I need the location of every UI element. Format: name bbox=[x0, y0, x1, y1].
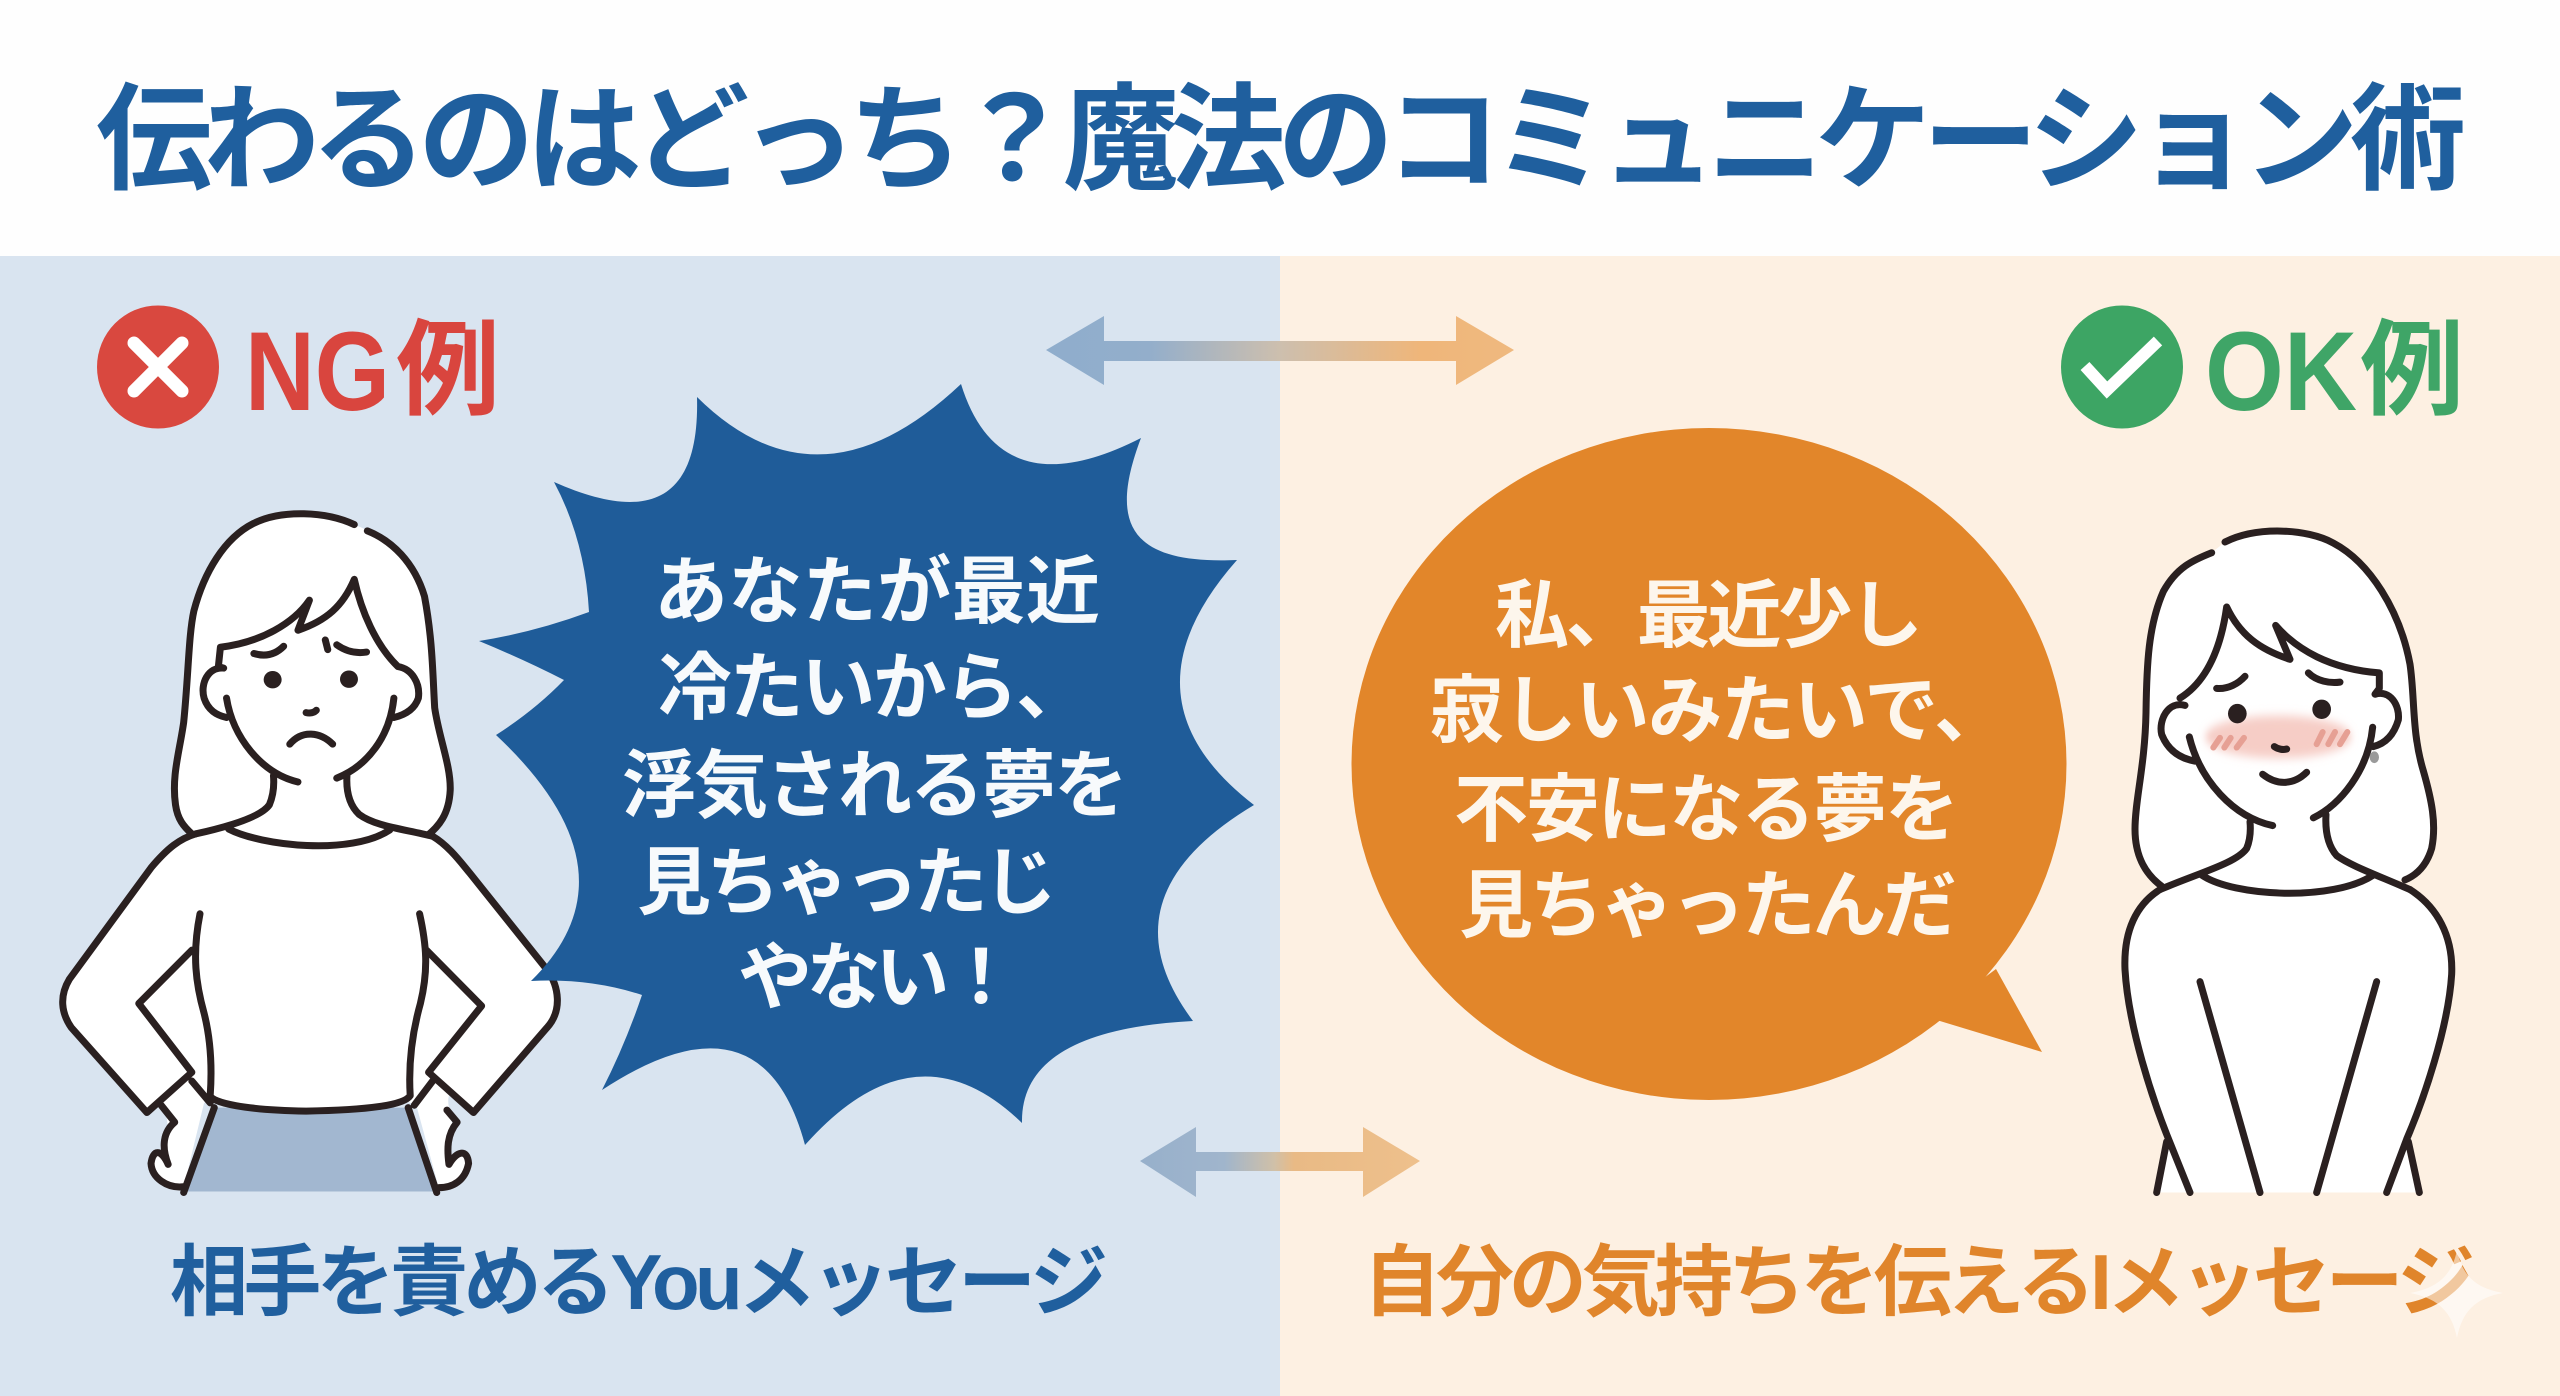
heading: OK example: OK bbox=[2205, 309, 2357, 434]
speech bubble: OK message bbox=[1352, 428, 2066, 1100]
heading: OK example: 例 bbox=[2360, 313, 2464, 429]
person left: face outline, fringe and ears bbox=[203, 579, 419, 782]
bubble text lines: 私、最近少し bbox=[1495, 574, 1923, 657]
burst text lines bbox=[622, 550, 1128, 1019]
person left: body and sleeves fill bbox=[63, 771, 556, 1188]
burst text lines: 冷たいから、 bbox=[658, 646, 1090, 729]
heading: NG example: NG bbox=[245, 309, 390, 434]
person right: blush bbox=[2205, 716, 2352, 758]
speech burst: NG message bbox=[479, 384, 1254, 1145]
person left: hair outline bbox=[174, 514, 450, 836]
person: frustrated woman with hands on hips bbox=[63, 514, 557, 1193]
heading: NG example: 例 bbox=[396, 313, 500, 429]
burst text lines: 見ちゃったじ bbox=[637, 841, 1057, 924]
bubble text lines: 寂しいみたいで、 bbox=[1430, 669, 2008, 752]
title band bbox=[0, 0, 2560, 256]
person right: hair outline bbox=[2135, 531, 2434, 886]
person right: shy expression bbox=[2213, 673, 2379, 782]
person: shy smiling woman bbox=[2125, 531, 2452, 1193]
person right: neck and collar bbox=[2160, 814, 2410, 893]
bubble text lines: 不安になる夢を bbox=[1454, 768, 1959, 851]
person right: hair bbox=[2135, 531, 2434, 886]
burst text lines: あなたが最近 bbox=[654, 550, 1100, 633]
arrow: top double arrow bbox=[1046, 316, 1514, 385]
person left: hair bbox=[174, 514, 450, 836]
person left: neck and collar bbox=[196, 776, 433, 846]
person left: skirt bbox=[186, 1108, 435, 1192]
person right: body outlines bbox=[2125, 890, 2452, 1193]
burst text lines: やない！ bbox=[738, 936, 1018, 1019]
heading: NG example bbox=[245, 309, 500, 434]
caption: You message: 相手を責めるYouメッセージ bbox=[170, 1238, 1108, 1326]
burst text lines: 浮気される夢を bbox=[622, 744, 1128, 827]
panel: OK example background bbox=[1280, 256, 2560, 1396]
person left: body outlines bbox=[63, 834, 557, 1193]
arrow: bottom double arrow bbox=[1140, 1127, 1420, 1197]
title: 伝わるのはどっち？魔法のコミュニケーション術 bbox=[96, 75, 2466, 205]
caption: I message: 自分の気持ちを伝えるIメッセージ bbox=[1363, 1238, 2475, 1326]
panel: NG example background bbox=[0, 256, 1280, 1396]
bubble text lines bbox=[1430, 574, 2008, 947]
icon: green check badge bbox=[2061, 306, 2183, 428]
person left: worried expression bbox=[254, 640, 367, 744]
person right: body fill bbox=[2125, 810, 2452, 1193]
bubble text lines: 見ちゃったんだ bbox=[1459, 864, 1957, 947]
icon: red cross badge bbox=[97, 306, 219, 428]
person right: face outline, fringe and ears bbox=[2161, 607, 2399, 826]
icon: sparkle watermark bbox=[2410, 1250, 2503, 1338]
heading: OK example bbox=[2205, 309, 2464, 434]
